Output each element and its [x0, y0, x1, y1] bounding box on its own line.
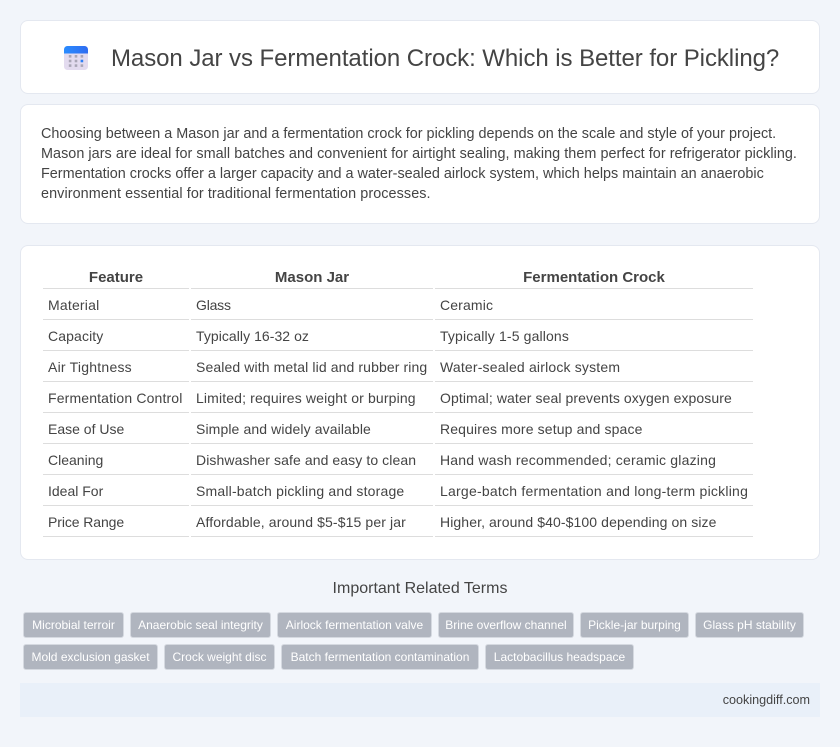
comparison table: Cleaning	[48, 452, 103, 468]
comparison table: Ease of Use	[48, 421, 124, 437]
tags: Lactobacillus headspace	[494, 650, 625, 664]
tags: Batch fermentation contamination	[291, 650, 469, 664]
comparison table: Feature	[89, 269, 143, 286]
comparison table: Mason Jar	[275, 269, 349, 286]
comparison table: Limited; requires weight or burping	[196, 390, 416, 406]
comparison table: Capacity	[48, 328, 103, 344]
intro text: Choosing between a Mason jar and a fermentation crock for pickling depends on the scale and style of your project.	[41, 126, 776, 142]
tags: Pickle-jar burping	[588, 618, 681, 632]
intro text: Mason jars are ideal for small batches and convenient for airtight sealing, making them perfect for refrigerator pickling.	[41, 146, 797, 162]
comparison table: Price Range	[48, 514, 124, 530]
tags: Anaerobic seal integrity	[138, 618, 263, 632]
comparison table: Water-sealed airlock system	[440, 359, 620, 375]
comparison table: Ideal For	[48, 483, 103, 499]
comparison table: Sealed with metal lid and rubber ring	[196, 359, 427, 375]
comparison table: Small-batch pickling and storage	[196, 483, 404, 499]
comparison table: Ceramic	[440, 297, 493, 313]
comparison table: Typically 1-5 gallons	[440, 328, 569, 344]
comparison table: Requires more setup and space	[440, 421, 643, 437]
header card	[20, 20, 820, 94]
comparison table: Higher, around $40-$100 depending on size	[440, 514, 717, 530]
intro text: Fermentation crocks offer a larger capacity and a water-sealed airlock system, which helps maintain an anaerobic	[41, 166, 764, 182]
comparison table: Material	[48, 297, 99, 313]
tags: Brine overflow channel	[445, 618, 567, 632]
tags: Mold exclusion gasket	[31, 650, 150, 664]
comparison table: Affordable, around $5-$15 per jar	[196, 514, 406, 530]
comparison table: Typically 16-32 oz	[196, 328, 309, 344]
comparison table: Simple and widely available	[196, 421, 371, 437]
title: Mason Jar vs Fermentation Crock: Which is Better for Pickling?	[111, 45, 779, 72]
tags: Airlock fermentation valve	[286, 618, 423, 632]
icon: calendar	[64, 46, 88, 70]
comparison table: Fermentation Crock	[523, 269, 665, 286]
comparison table: Air Tightness	[48, 359, 132, 375]
tags: Glass pH stability	[703, 618, 796, 632]
source credit: cookingdiff.com	[723, 693, 810, 707]
related terms heading: Important Related Terms	[333, 580, 507, 597]
intro card	[20, 104, 820, 224]
comparison table: Optimal; water seal prevents oxygen exposure	[440, 390, 732, 406]
footer	[20, 683, 820, 717]
comparison table: Fermentation Control	[48, 390, 183, 406]
tags: Microbial terroir	[32, 618, 115, 632]
intro text	[41, 126, 797, 202]
comparison table: Glass	[196, 297, 231, 313]
comparison table: Large-batch fermentation and long-term pickling	[440, 483, 748, 499]
tags: Crock weight disc	[172, 650, 267, 664]
intro text: environment essential for traditional fermentation processes.	[41, 186, 431, 202]
comparison table: Hand wash recommended; ceramic glazing	[440, 452, 716, 468]
table card	[20, 245, 820, 560]
comparison table: Dishwasher safe and easy to clean	[196, 452, 416, 468]
